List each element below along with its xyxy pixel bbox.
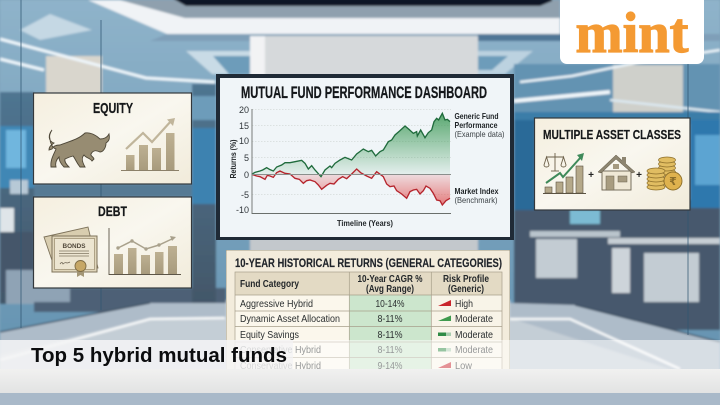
icon: bond bar chart: [109, 228, 181, 274]
row: equity savings: Moderate: [455, 330, 493, 341]
line chart: fund versus market index: [228, 105, 451, 228]
red area: [252, 169, 450, 205]
y axis tick labels: -10: [236, 205, 249, 215]
legend: generic fund: Generic Fund: [454, 111, 498, 121]
row: conservative hybrid second faded: 9-14%: [378, 361, 403, 372]
table header row: (Generic): [448, 284, 484, 295]
row: conservative hybrid faded: [240, 346, 493, 355]
headline: Top 5 hybrid mutual funds: [31, 345, 287, 367]
y axis tick labels: -5: [241, 190, 249, 200]
heading: equity: EQUITY: [93, 100, 133, 117]
table header row: Risk Profile: [443, 274, 489, 285]
row: aggressive hybrid: [240, 300, 472, 309]
row: dynamic asset allocation: Dynamic Asset Allocation: [240, 314, 340, 325]
row: equity savings: Equity Savings: [240, 330, 299, 341]
central pillar: [250, 36, 478, 76]
icon: rupee coins: ₹: [669, 175, 677, 188]
y axis tick labels: 5: [244, 153, 249, 163]
icon: rising bar chart: [121, 118, 179, 170]
left office: [0, 92, 34, 304]
y axis tick labels: 10: [239, 136, 249, 146]
panel: debt: [34, 197, 192, 288]
row: dynamic asset allocation: Moderate: [455, 314, 493, 325]
table header row: 10-Year CAGR %: [358, 274, 423, 285]
icon: rupee coins: [647, 157, 682, 190]
right upper glass: [514, 64, 720, 124]
floor: [0, 303, 720, 405]
legend: generic fund: [454, 111, 505, 139]
row: equity savings: [240, 330, 493, 340]
plus sign: +: [588, 170, 594, 181]
table header row: [235, 272, 502, 295]
row: aggressive hybrid: Aggressive Hybrid: [240, 299, 313, 310]
row: conservative hybrid second faded: Low: [455, 361, 473, 372]
table header row: Fund Category: [240, 279, 299, 290]
ceiling panels: [20, 14, 92, 40]
y axis tick labels: 20: [239, 105, 249, 115]
row: aggressive hybrid: High: [455, 299, 473, 310]
row: conservative hybrid second faded: Conservative Hybrid: [240, 361, 321, 372]
legend: generic fund: (Example data): [454, 129, 505, 139]
lower third banner: [0, 340, 720, 405]
legend: market index: (Benchmark): [454, 195, 498, 205]
row: conservative hybrid faded: Moderate: [455, 345, 493, 356]
y axis title: Returns (%): [228, 139, 238, 178]
panel: equity: [34, 93, 192, 184]
legend: generic fund: Performance: [454, 120, 498, 130]
y axis tick labels: [236, 105, 249, 215]
legend: market index: Market Index: [454, 186, 499, 196]
row: conservative hybrid faded: Conservative Hybrid: [240, 345, 321, 356]
ceiling band: [115, 0, 560, 18]
icon: bull: [49, 130, 109, 167]
row: aggressive hybrid: 10-14%: [376, 299, 405, 310]
row: equity savings: 8-11%: [378, 330, 403, 341]
row: dynamic asset allocation: 8-11%: [378, 314, 403, 325]
right office: [514, 200, 720, 330]
y axis tick labels: 15: [239, 121, 249, 131]
icon: scales and growth chart: [543, 153, 586, 194]
heading: table title: 10-YEAR HISTORICAL RETURNS (GENERAL CATEGORIES): [235, 256, 502, 270]
panel: historical returns table: [226, 250, 510, 380]
row: conservative hybrid faded: 8-11%: [378, 345, 403, 356]
heading: dashboard title: MUTUAL FUND PERFORMANCE DASHBOARD: [241, 84, 487, 102]
panel: multiple asset classes: [534, 118, 690, 210]
heading: debt: DEBT: [98, 203, 127, 219]
row: conservative hybrid second faded: [240, 362, 472, 369]
icon: bonds certificate: BONDS: [62, 243, 86, 250]
gap between side panels and monitor: [192, 84, 216, 304]
table body cells: [235, 272, 502, 375]
logo: mint: mint: [576, 2, 689, 65]
left rear pillar and lights: [46, 56, 102, 96]
legend: market index: [454, 186, 499, 205]
panel: performance dashboard monitor: [216, 74, 514, 240]
plus sign: +: [636, 170, 642, 181]
icon: house: [598, 155, 635, 190]
icon: bonds certificate: [44, 227, 98, 277]
y axis tick labels: 0: [244, 170, 249, 180]
glass frame lines: [21, 0, 688, 335]
row: dynamic asset allocation: [240, 314, 493, 324]
green area: [252, 113, 450, 177]
table header row: (Avg Range): [366, 284, 414, 295]
heading: multiple asset classes: MULTIPLE ASSET CLASSES: [543, 127, 681, 142]
x axis title: Timeline (Years): [337, 218, 393, 228]
